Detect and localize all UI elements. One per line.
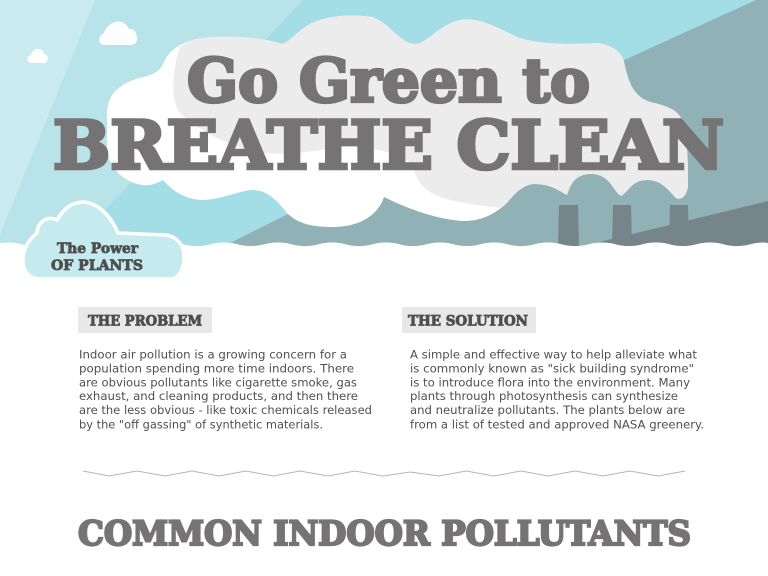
badge text: OF PLANTS [51, 258, 143, 274]
header illustration background [0, 0, 768, 247]
panel: the solution [402, 307, 704, 432]
body text: the solution: from a list of tested and approved NASA greenery. [410, 418, 704, 432]
wavy ground edge [0, 242, 768, 252]
body text: the solution [410, 348, 704, 432]
body text: the problem: Indoor air pollution is a growing concern for a [79, 348, 347, 362]
body text: the problem: are the less obvious - like toxic chemicals released [79, 403, 372, 417]
body text: the solution: A simple and effective way to help alleviate what [410, 348, 697, 362]
heading bar: the solution: THE SOLUTION [408, 314, 528, 330]
body text: the problem: population spending more time indoors. There [79, 362, 354, 376]
body text: the problem: exhaust, and cleaning products, and then there [79, 389, 358, 403]
smoke cloud [107, 15, 688, 227]
title [53, 46, 724, 184]
title: BREATHE CLEAN [53, 106, 724, 184]
badge text: The Power [57, 241, 139, 257]
badge: The Power of Plants cloud [23, 202, 184, 279]
icon: small sky cloud [27, 49, 48, 63]
body text: the problem [79, 348, 372, 432]
body text: the solution: is commonly known as "sick building syndrome" [410, 362, 694, 376]
heading bar: the solution [402, 307, 536, 333]
body text: the problem: are obvious pollutants like cigarette smoke, gas [79, 376, 357, 390]
title: Go Green to [187, 46, 590, 116]
heading bar: the problem: THE PROBLEM [88, 314, 202, 330]
badge text [51, 241, 143, 274]
icon: large sky cloud [99, 21, 137, 45]
body text: the solution: and neutralize pollutants. The plants below are [410, 403, 685, 417]
body text: the solution: plants through photosynthesis can synthesize [410, 389, 678, 403]
heading bar: the problem [78, 307, 212, 333]
section heading: common indoor pollutants: COMMON INDOOR POLLUTANTS [78, 514, 691, 554]
panel: the problem [78, 307, 372, 432]
factory chimneys and ground [558, 201, 768, 247]
body text: the solution: is to introduce flora into the environment. Many [410, 376, 690, 390]
body text: the problem: by the "off gassing" of synthetic materials. [79, 418, 323, 432]
